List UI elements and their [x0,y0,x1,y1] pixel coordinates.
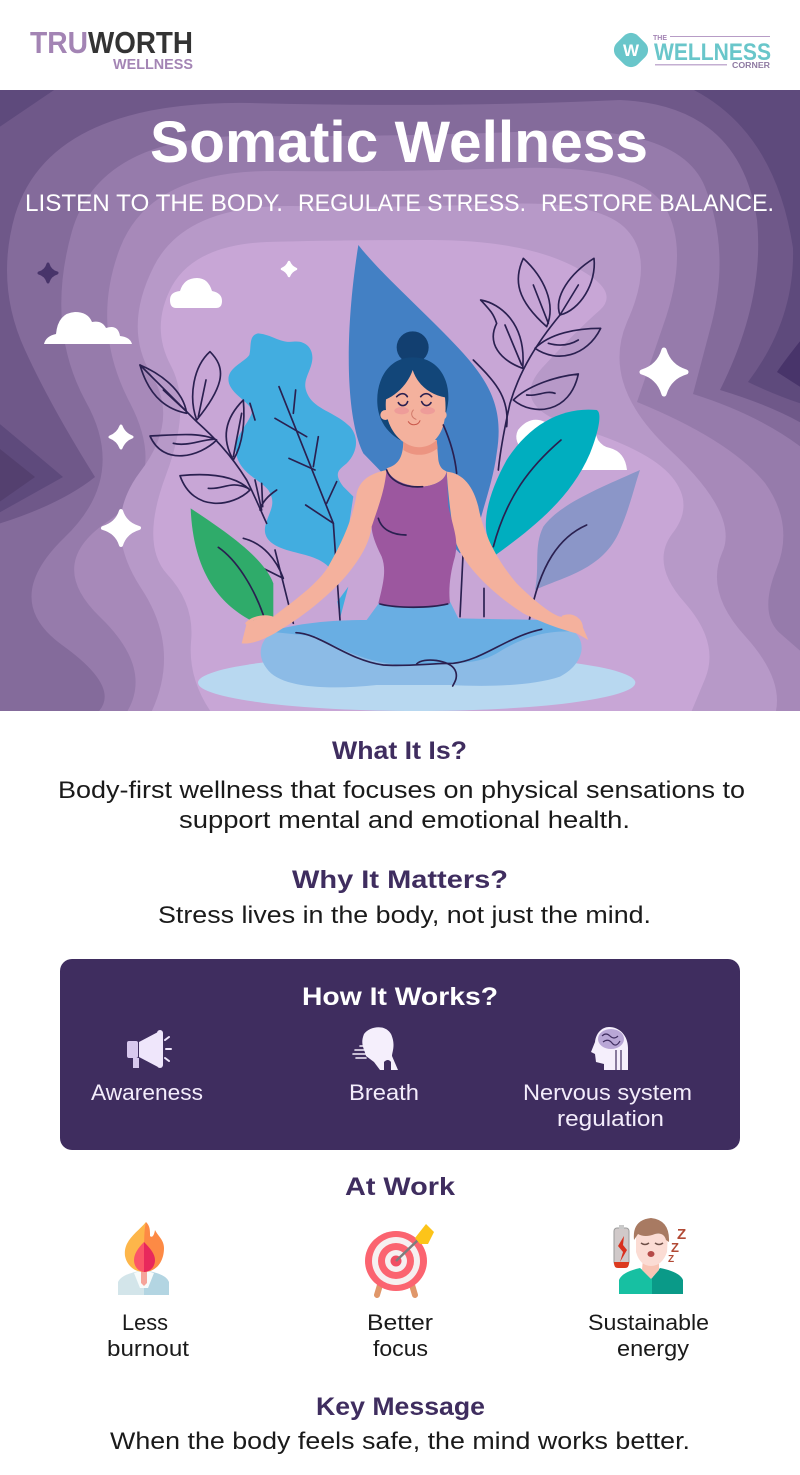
woman: face and body lines [296,394,542,686]
tagline: RESTORE BALANCE. [541,190,774,217]
hero illustration panel [0,88,800,715]
label: breath: Breath [349,1080,419,1105]
woman: upper legs [270,602,577,665]
label: less burnout: Less [122,1310,168,1335]
ground ellipse [198,662,636,711]
logo: The Wellness Corner: CORNER [732,61,770,70]
icon: megaphone [127,1030,171,1068]
tagline [27,194,772,211]
icon: brain head [591,1027,628,1070]
heading: what it is: What It Is? [332,737,467,765]
woman: lower legs [260,631,582,688]
logo: The Wellness Corner: THE [653,35,667,42]
woman: fingers [247,616,582,628]
logo: Truworth Wellness: TRU [30,25,88,60]
heading: how it works: How It Works? [302,983,498,1011]
tagline: REGULATE STRESS. [298,190,526,217]
icon: tired person: Z [677,1226,686,1243]
hero contour background [0,88,800,715]
green leaf [191,508,273,623]
woman: hair [377,357,448,440]
heading: at work: At Work [345,1173,455,1201]
heading: key message: Key Message [316,1393,485,1421]
icon: tired person: Z [668,1254,674,1265]
heading: why it matters: Why It Matters? [292,866,508,894]
woman: skin [242,370,588,644]
text: what it is description: support mental and emotional health. [179,807,630,834]
panel: how it works [60,959,740,1150]
icon: breath [353,1027,398,1070]
woman: bun [396,331,429,359]
label: nervous system regulation: Nervous system [523,1080,692,1105]
logo: Truworth Wellness [30,25,193,73]
label: better focus: focus [373,1336,428,1361]
teal leaf [486,410,599,557]
label: nervous system regulation: regulation [557,1106,664,1131]
label: less burnout [107,1310,189,1361]
woman: blush [394,407,435,414]
periwinkle leaf [535,470,640,590]
label: sustainable energy [588,1310,709,1361]
text: why it matters description: Stress lives in the body, not just the mind. [158,902,651,929]
icon: tired person: Z [671,1240,679,1255]
label: sustainable energy: Sustainable [588,1310,709,1335]
label: awareness: Awareness [91,1080,203,1105]
title: Somatic Wellness [150,110,648,175]
left plant outline [140,352,293,623]
logo: The Wellness Corner: W [623,41,640,60]
label: sustainable energy: energy [617,1336,689,1361]
icon: target [365,1224,434,1295]
icon: burnout flame head [118,1222,169,1295]
woman: neck shadow [403,440,438,455]
woman: purple top [372,468,456,607]
right plant outline [473,258,601,470]
leaf veins and stems [218,387,587,620]
logo: The Wellness Corner [610,29,771,71]
logo: The Wellness Corner: WELLNESS [654,39,771,66]
logo: Truworth Wellness: WELLNESS [113,56,193,73]
icon: tired person [614,1218,686,1294]
decorative stars and clouds [39,262,686,545]
label: better focus [367,1310,433,1361]
light blue leaf [228,333,356,618]
tagline: LISTEN TO THE BODY. [25,190,283,217]
text: what it is description: Body-first wellness that focuses on physical sensations to [58,777,745,804]
label: nervous system regulation [523,1080,692,1131]
logo: Truworth Wellness: WORTH [88,25,193,60]
text: key message: When the body feels safe, the mind works better. [110,1428,690,1455]
label: less burnout: burnout [107,1336,189,1361]
label: better focus: Better [367,1310,433,1335]
meditating woman and plants [140,245,640,711]
big blue leaf [349,245,499,553]
text: what it is description [58,777,745,834]
